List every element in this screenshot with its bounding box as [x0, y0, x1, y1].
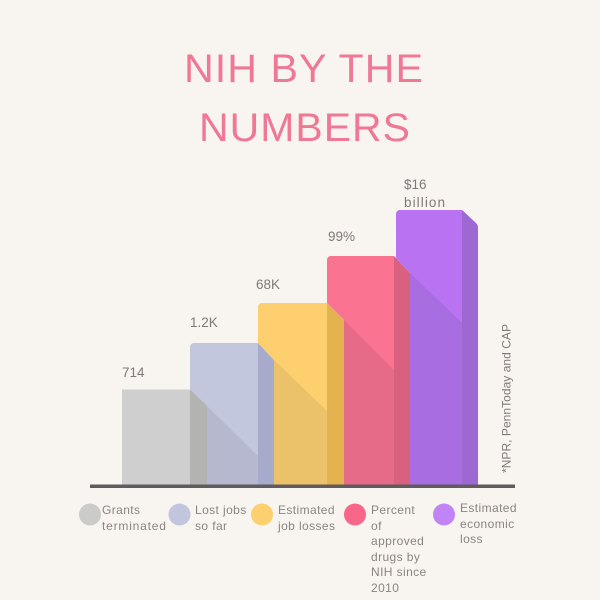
- legend: grants terminated: Grants: [102, 503, 140, 517]
- axis line: [90, 484, 515, 488]
- legend: estimated economic loss: Estimated: [460, 501, 517, 515]
- legend: percent of approved drugs: [344, 503, 427, 595]
- bar: grants terminated: [122, 390, 207, 485]
- legend: percent of approved drugs: drugs by: [371, 550, 420, 564]
- value labels: 1.2K: [190, 315, 218, 330]
- legend: lost jobs so far: so far: [195, 519, 227, 533]
- title: [184, 47, 424, 150]
- legend: estimated economic loss: economic: [460, 517, 515, 531]
- legend: lost jobs so far: Lost jobs: [195, 503, 247, 517]
- legend: percent of approved drugs: Percent: [371, 503, 415, 517]
- bar chart: [90, 177, 515, 488]
- legend: lost jobs so far: [168, 503, 247, 533]
- value labels: [122, 177, 445, 380]
- value labels: billion: [404, 195, 445, 210]
- source note: *NPR, PennToday and CAP: [500, 324, 514, 473]
- legend: percent of approved drugs: approved: [371, 534, 424, 548]
- bar: percent of approved drugs: [327, 256, 410, 485]
- legend: estimated economic loss: [433, 501, 517, 546]
- bar: lost jobs so far: [190, 343, 274, 485]
- legend: grants terminated: [79, 503, 167, 533]
- title: NUMBERS: [199, 106, 411, 150]
- legend: estimated job losses: Estimated: [278, 503, 335, 517]
- bar: estimated job losses: [258, 303, 344, 485]
- bar: estimated economic loss: [396, 210, 478, 485]
- value labels: 714: [122, 365, 145, 380]
- legend: [79, 501, 517, 595]
- legend: grants terminated: terminated: [102, 519, 167, 533]
- legend: percent of approved drugs: 2010: [371, 581, 399, 595]
- value labels: 68K: [256, 277, 280, 292]
- legend: estimated job losses: job losses: [277, 519, 335, 533]
- value labels: $16: [404, 177, 427, 192]
- title: NIH BY THE: [184, 47, 424, 91]
- legend: percent of approved drugs: of: [371, 519, 382, 533]
- legend: estimated job losses: [251, 503, 335, 533]
- legend: estimated economic loss: loss: [460, 532, 483, 546]
- legend: percent of approved drugs: NIH since: [371, 565, 427, 579]
- value labels: 99%: [328, 229, 355, 244]
